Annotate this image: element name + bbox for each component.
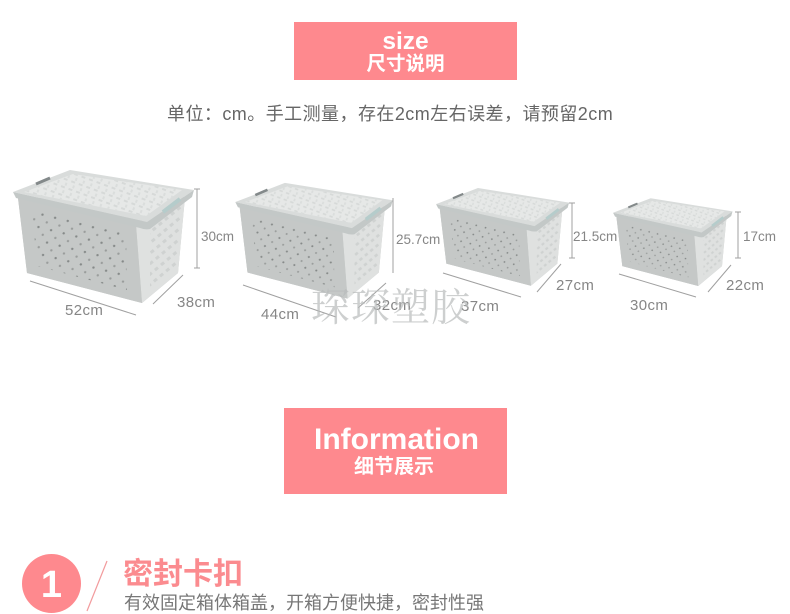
basket 37cm: 37cm — [461, 298, 499, 315]
basket 52cm — [13, 170, 234, 319]
basket 30cm — [613, 198, 776, 314]
basket 44cm: 32cm — [373, 297, 411, 314]
basket 44cm: 44cm — [261, 306, 299, 323]
basket 30cm: 17cm — [743, 229, 776, 244]
feature number badge — [22, 554, 81, 613]
banner: size: size — [382, 28, 429, 55]
basket 44cm — [235, 183, 440, 323]
feature description: 有效固定箱体箱盖，开箱方便快捷，密封性强 — [124, 593, 484, 613]
measurement note: 单位：cm。手工测量，存在2cm左右误差，请预留2cm — [167, 104, 613, 124]
basket 37cm — [436, 188, 617, 315]
basket 37cm: 21.5cm — [573, 229, 617, 244]
basket 30cm: 22cm — [726, 277, 764, 294]
banner: information: Information — [314, 423, 479, 456]
basket 30cm: 30cm — [630, 297, 668, 314]
basket 52cm: 38cm — [177, 294, 215, 311]
feature number badge: 1 — [41, 564, 62, 606]
basket 44cm: 25.7cm — [396, 232, 440, 247]
banner: information: 细节展示 — [354, 456, 434, 478]
watermark: 琛琛塑胶 — [311, 287, 471, 330]
feature title: 密封卡扣 — [123, 558, 243, 591]
basket 52cm: 30cm — [201, 229, 234, 244]
banner: information — [284, 408, 507, 494]
banner: size — [294, 22, 517, 80]
basket 37cm: 27cm — [556, 277, 594, 294]
banner: size: 尺寸说明 — [366, 53, 444, 75]
basket 52cm: 52cm — [65, 302, 103, 319]
